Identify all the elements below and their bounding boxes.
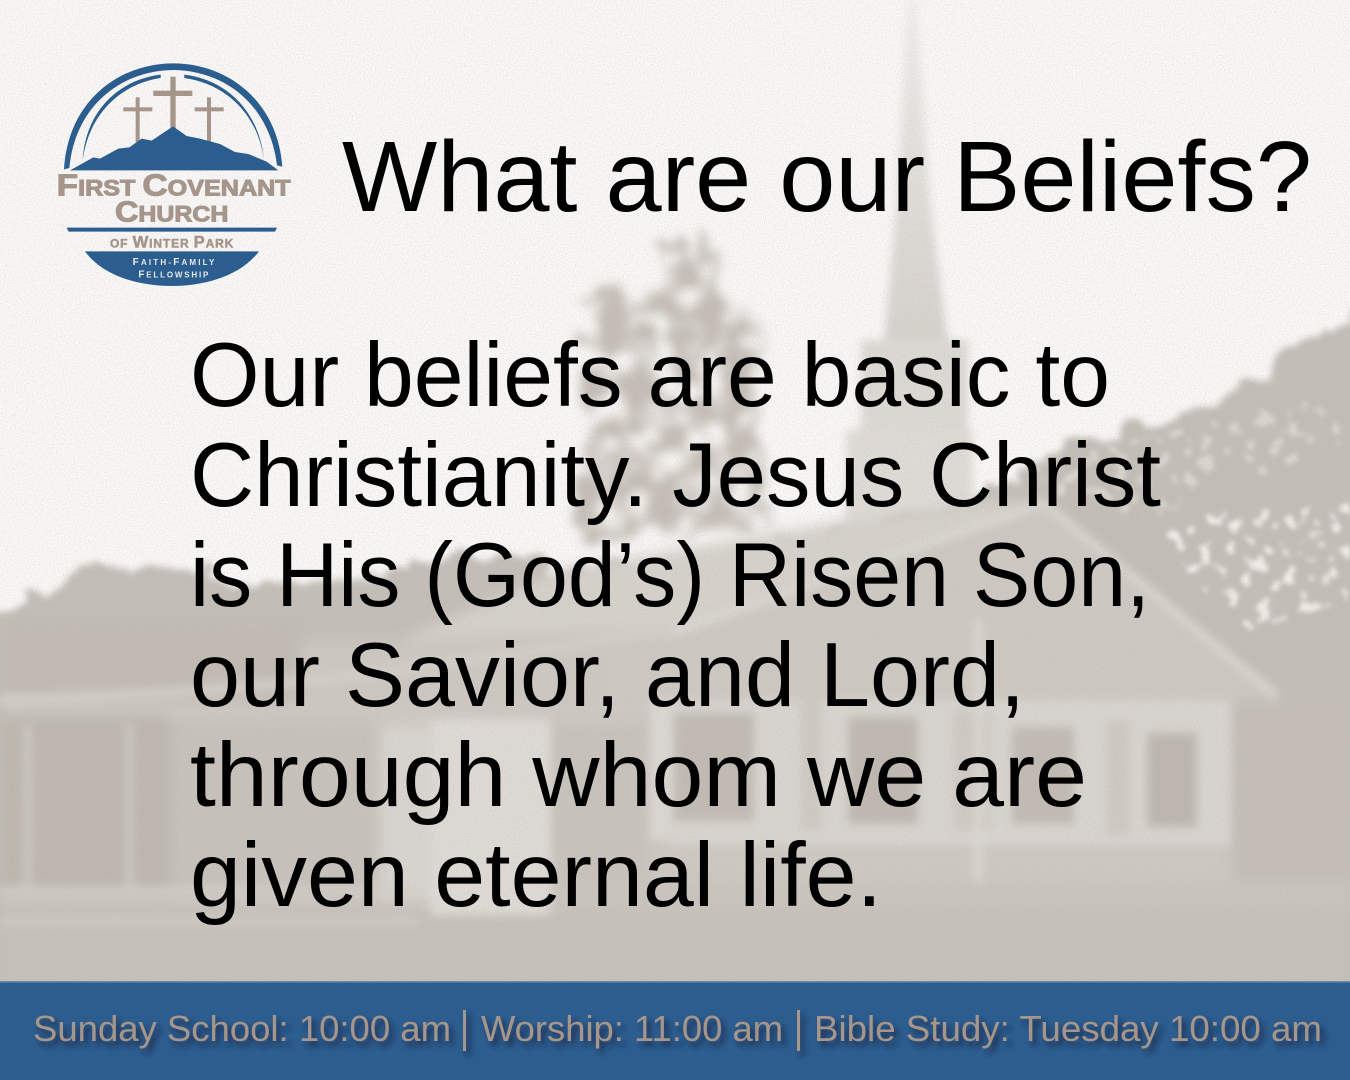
lower photo mass: [0, 320, 1350, 1000]
icon: outer blue arc: [64, 63, 282, 169]
logo divider line: [67, 228, 277, 232]
body text block: through whom we are: [190, 725, 1087, 826]
footer service times: Bible Study: Tuesday 10:00 am: [814, 1008, 1322, 1049]
logo text: Faith-Family: FAITH-FAMILY: [133, 257, 215, 268]
footer service times: [33, 1008, 1322, 1051]
footer service times: Worship: 11:00 am: [481, 1008, 783, 1049]
footer service times: Sunday School: 10:00 am: [33, 1008, 451, 1049]
body text block: given eternal life.: [190, 825, 882, 926]
body text block: [190, 325, 1161, 926]
logo: First Covenant Church: [57, 63, 291, 286]
footer bar: [0, 981, 1350, 1080]
title: What are our Beliefs?: [342, 121, 1312, 233]
body text block: our Savior, and Lord,: [190, 625, 1025, 726]
icon: three crosses: [123, 77, 224, 142]
steeple: [846, 0, 973, 530]
logo text: Fellowship: FELLOWSHIP: [138, 269, 209, 280]
icon: blue mountain: [70, 126, 278, 170]
body text block: Christianity. Jesus Christ: [190, 425, 1161, 526]
logo text: of Winter Park: OF WINTER PARK: [110, 232, 234, 251]
tree highlights: [1010, 400, 1350, 630]
logo bottom badge: [85, 251, 259, 286]
logo text: First Covenant: FIRST COVENANT: [57, 169, 291, 203]
body text block: Our beliefs are basic to: [190, 325, 1110, 426]
body text block: is His (God’s) Risen Son,: [190, 525, 1150, 626]
icon: inner blue arc: [83, 75, 264, 161]
logo text: Church: CHURCH: [115, 197, 228, 229]
centre tree: [570, 233, 775, 540]
roof lines and wall details: [0, 503, 1277, 924]
